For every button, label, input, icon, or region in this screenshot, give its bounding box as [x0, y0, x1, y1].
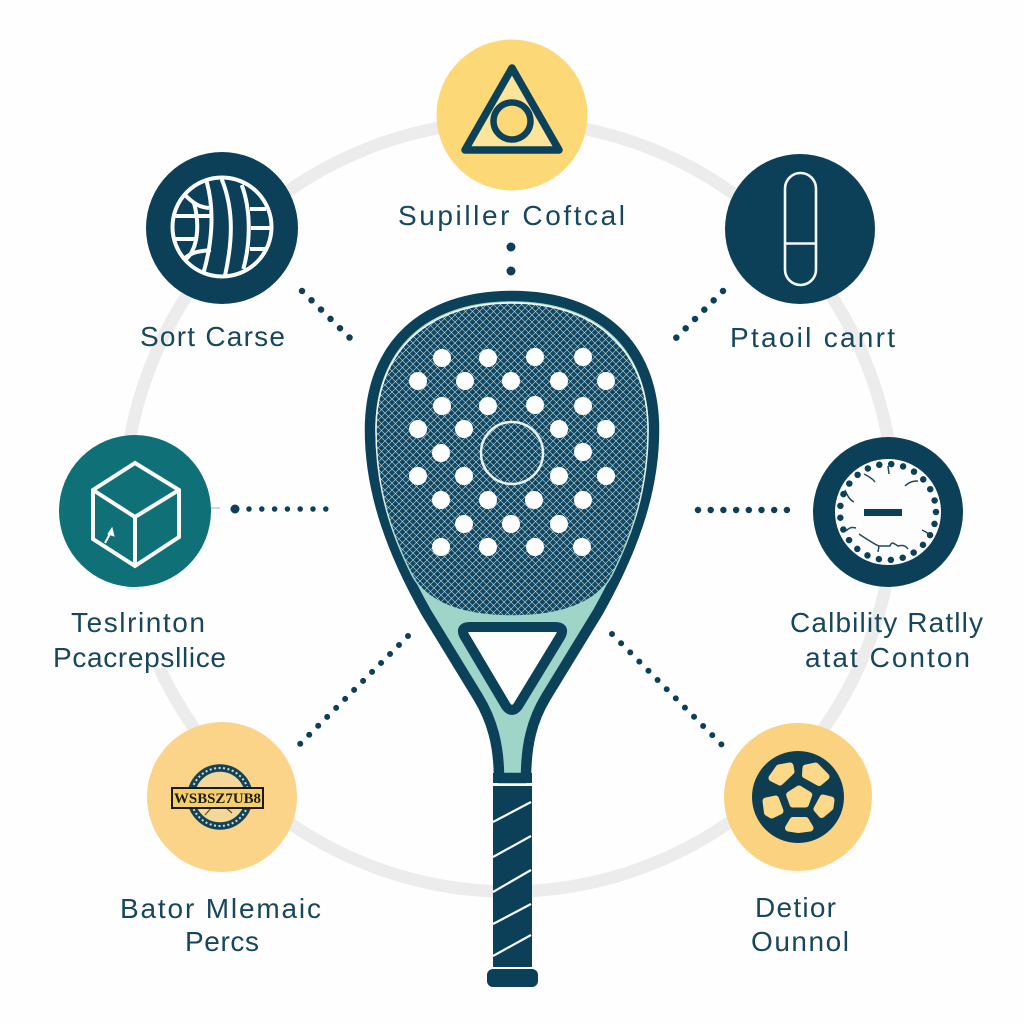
- connector tick: [211, 507, 220, 509]
- icon: seal badge: WSBSZ7UB8: [174, 791, 261, 807]
- dotted connector: top right: [676, 291, 723, 338]
- label backing gap: [115, 590, 185, 668]
- icon: capsule: [785, 173, 816, 285]
- node: bottom left amber: [147, 722, 297, 872]
- icon: triangle with circle: [465, 68, 559, 150]
- label: top left: Sort Carse: [140, 321, 285, 352]
- dotted connector: top left: [302, 291, 350, 338]
- icon: football: [752, 751, 844, 843]
- label: right second line: atat Conton: [805, 642, 970, 673]
- label: bottom right second line: Ounnol: [751, 926, 849, 957]
- node: bottom right amber: [724, 723, 872, 871]
- node: top right navy: [725, 154, 875, 304]
- icon: dial: [835, 459, 941, 565]
- background ring: [124, 122, 894, 892]
- icon: net ball: [172, 178, 272, 276]
- node: top left navy: [146, 152, 298, 304]
- label: top: Supiller Coftcal: [398, 200, 625, 231]
- icon: cube: [93, 463, 179, 566]
- racket grip: [487, 773, 538, 987]
- dotted connector: bottom left: [300, 636, 408, 744]
- label: top right: Ptaoil canrt: [730, 322, 895, 353]
- racket holes: [409, 348, 615, 556]
- label: bottom left: Bator Mlemaic: [120, 893, 321, 924]
- node: left teal: [59, 435, 211, 587]
- racket sweet spot: [481, 422, 543, 484]
- label: bottom left second line: Percs: [185, 926, 259, 957]
- label: bottom right: Detior: [755, 892, 836, 923]
- racket frame: [370, 296, 654, 778]
- label: left: Teslrinton: [71, 607, 205, 638]
- node: right navy: [813, 437, 963, 587]
- icon: seal badge: [172, 768, 263, 826]
- label: left second line: Pcacrepsllice: [53, 642, 226, 673]
- dotted connector: bottom right: [612, 634, 722, 745]
- label: right: Calbility Ratlly: [790, 607, 983, 638]
- dotted connector: right: [698, 507, 787, 513]
- racket mesh face: [376, 303, 648, 616]
- racket throat triangle: [463, 627, 562, 710]
- node: top yellow: [436, 40, 588, 190]
- dotted connector: left: [230, 504, 326, 514]
- dotted connector: top: [506, 247, 516, 272]
- padel racket: [370, 296, 654, 987]
